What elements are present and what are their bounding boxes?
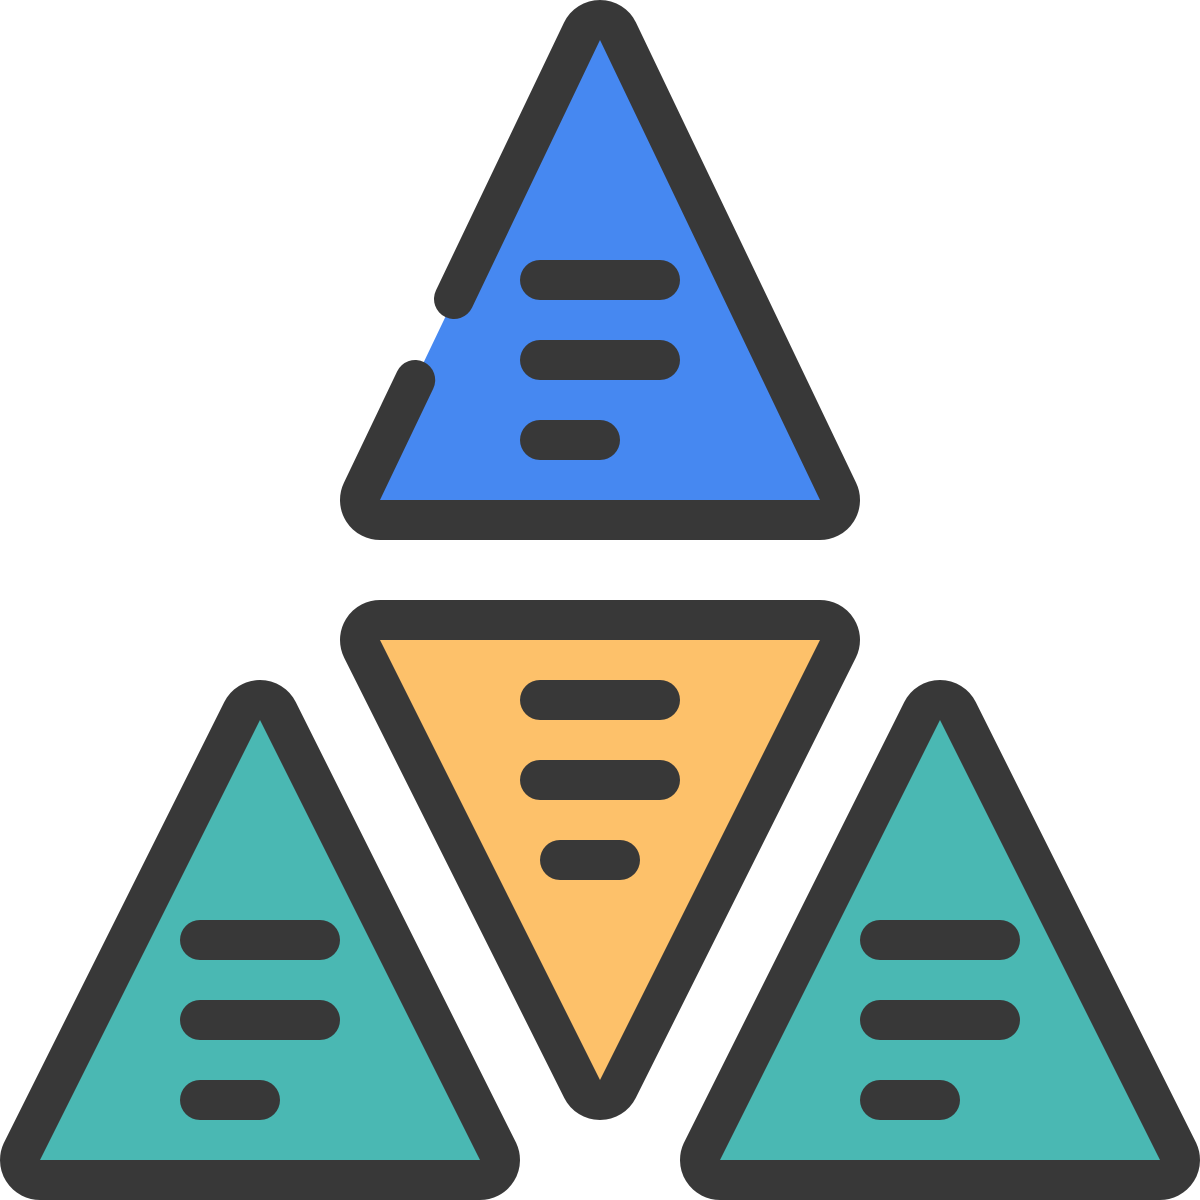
blue fill — [360, 20, 840, 520]
panel: bottom-right teal triangle — [700, 700, 1180, 1180]
text lines — [540, 280, 660, 440]
text lines — [880, 940, 1000, 1100]
text lines — [540, 700, 660, 860]
text lines — [200, 940, 320, 1100]
panel: centre orange inverted triangle — [360, 620, 840, 1100]
teal triangle with outline — [700, 700, 1180, 1180]
panel: top blue triangle — [360, 20, 840, 520]
panel: bottom-left teal triangle — [20, 700, 500, 1180]
teal triangle with outline — [20, 700, 500, 1180]
orange triangle with outline — [360, 620, 840, 1100]
outline with gap on left side — [360, 20, 840, 520]
